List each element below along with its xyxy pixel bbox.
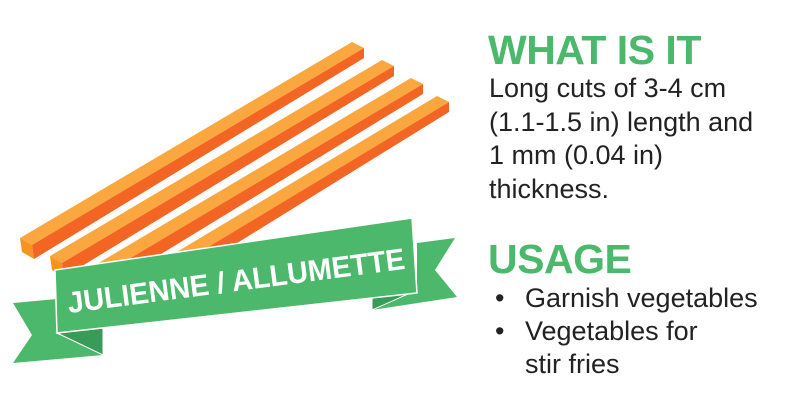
stick 2 [50,60,394,277]
text: description: 1 mm (0.04 in) [489,140,663,170]
list: usage bullets [495,283,758,379]
heading: what is it: WHAT IS IT [488,27,701,73]
stick 3 [80,78,423,295]
banner ribbon [13,218,457,363]
list: usage bullets: • [495,283,504,313]
illustration: julienne sticks with banner [13,42,457,363]
text: description: thickness. [489,174,609,204]
heading: usage: USAGE [488,236,631,282]
list: usage bullets: Garnish vegetables [525,283,758,313]
banner text: JULIENNE / ALLUMETTE [65,243,407,320]
text: description [489,73,753,204]
list: usage bullets: Vegetables for [525,316,698,346]
list: usage bullets: • [495,316,504,346]
text: description: Long cuts of 3-4 cm [489,73,726,103]
list: usage bullets: stir fries [525,349,620,379]
text: description: (1.1-1.5 in) length and [489,106,753,136]
stick 4 [110,96,449,313]
stick 1 [20,42,364,259]
